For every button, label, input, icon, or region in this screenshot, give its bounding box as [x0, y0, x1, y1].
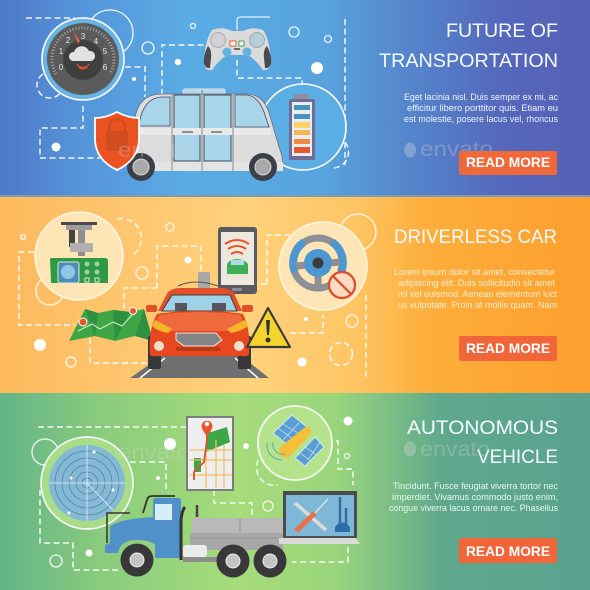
illustration: road	[130, 355, 269, 378]
heading	[407, 418, 558, 468]
connector lines	[19, 219, 366, 378]
body text	[394, 267, 557, 310]
icon: speedometer: 2	[66, 36, 71, 45]
heading: DRIVERLESS CAR	[394, 227, 557, 248]
icon: speedometer: 6	[103, 63, 108, 72]
icon: steering wheel with no-hands sign	[279, 222, 367, 310]
icon: map with pins	[69, 308, 153, 341]
button: read more: READ MORE	[466, 154, 550, 170]
body text: adipiscing elit. Duis sollicitudin sit amet	[398, 278, 555, 288]
illustration: gray dump truck	[105, 496, 286, 578]
icon: speedometer: 4	[94, 37, 99, 46]
button: read more: READ MORE	[466, 543, 550, 559]
icon: laptop with tools	[279, 491, 360, 544]
panel: autonomous vehicle	[0, 393, 590, 590]
heading: VEHICLE	[477, 447, 558, 468]
decorative rings and dots	[21, 214, 376, 367]
button: read more: READ MORE	[466, 340, 550, 356]
body text: efficitur libero porttitor quis. Etiam eu	[407, 103, 558, 113]
icon: speedometer: 0	[59, 63, 64, 72]
body text: Eget lacinia nisl. Duis semper ex mi, ac	[404, 92, 558, 102]
icon: satellite in circle	[258, 406, 332, 480]
body text: Tincidunt. Fusce feugiat viverra tortor nec	[393, 481, 558, 491]
icon: radar	[41, 437, 133, 529]
button: read more	[459, 538, 557, 563]
icon: battery in circle	[260, 84, 346, 170]
illustration: red self-driving car	[146, 272, 253, 369]
decorative rings and dots	[52, 10, 332, 152]
heading: TRANSPORTATION	[379, 51, 558, 72]
heading: AUTONOMOUS	[407, 418, 558, 439]
icon: speedometer	[42, 18, 124, 100]
watermark: envato	[420, 438, 490, 461]
icon: dash camera in circle	[35, 212, 123, 300]
icon: speedometer: 5	[103, 47, 108, 56]
watermark: envato	[420, 138, 493, 161]
icon: speedometer: 1	[59, 47, 64, 56]
connector lines	[38, 427, 353, 570]
body text: us vulputate. Proin at mollis quam. Nam	[398, 300, 557, 310]
body text: congue viverra lacus ornare nec. Phasellus	[389, 503, 558, 513]
icon: smartphone with car	[218, 227, 257, 294]
body text: mi vel euismod. Aenean elementum luct	[398, 289, 557, 299]
button: read more	[459, 336, 557, 361]
icon: security shield	[95, 112, 139, 170]
panel: driverless car	[0, 195, 590, 393]
body text: est molestie, posere lacus vel, rhoncus	[404, 114, 558, 124]
connector lines	[26, 18, 349, 168]
heading: FUTURE OF	[446, 21, 558, 42]
icon: game controller	[204, 17, 271, 70]
heading	[379, 21, 558, 72]
panel: future of transportation	[0, 0, 590, 195]
watermark: envato	[118, 139, 190, 162]
watermark: envato	[118, 441, 190, 464]
button: read more	[459, 151, 557, 175]
body text: Lorem ipsum dolor sit amet, consectetur	[394, 267, 555, 277]
body text	[404, 92, 558, 124]
icon: warning triangle	[247, 308, 290, 347]
illustration: autonomous shuttle bus	[127, 89, 283, 181]
icon: speedometer: 3	[81, 32, 86, 41]
icon: navigation map	[187, 417, 233, 490]
decorative rings and dots	[32, 416, 352, 567]
body text	[389, 481, 558, 513]
body text: imperdiet. Vivamus commodo justo enim,	[392, 492, 558, 502]
